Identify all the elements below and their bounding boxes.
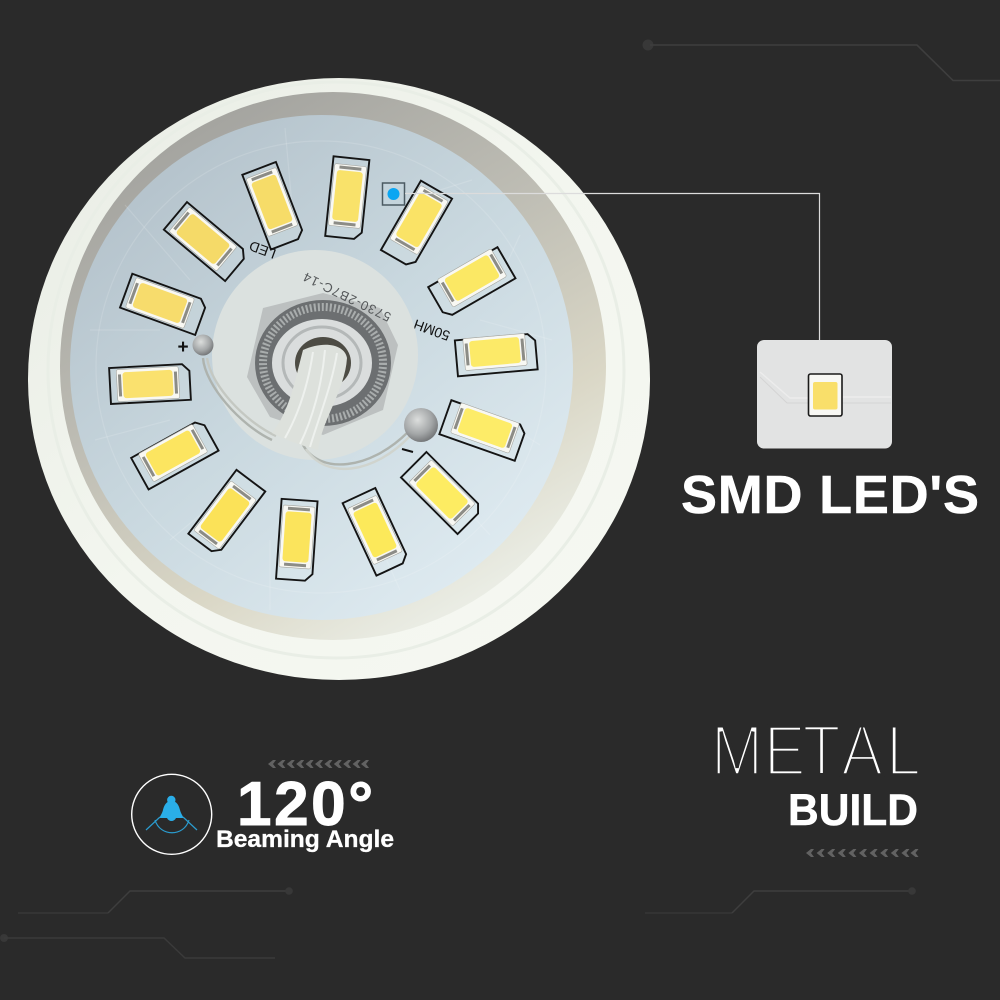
heading: METAL: METAL bbox=[711, 711, 921, 791]
circuit board disc bbox=[70, 115, 573, 620]
SMD LED thumbnail card bbox=[757, 340, 892, 448]
translucent cable bbox=[272, 345, 347, 450]
nut inner collar bbox=[272, 319, 372, 407]
heading: BUILD: BUILD bbox=[788, 786, 918, 835]
decorative circuit line: top right bbox=[642, 40, 1000, 80]
LED 6 bbox=[401, 452, 483, 534]
LED 9 bbox=[188, 470, 265, 555]
centre hole bbox=[295, 337, 351, 389]
solder ball right bbox=[404, 408, 438, 442]
board print: LED: LED bbox=[247, 238, 278, 262]
decorative circuit line: bottom right bbox=[645, 887, 916, 913]
label: Beaming Angle: Beaming Angle bbox=[216, 826, 394, 853]
LED 1 bbox=[325, 156, 369, 240]
LED 7 bbox=[343, 488, 409, 576]
board trace lines bbox=[90, 128, 552, 610]
silver lead wires bbox=[203, 358, 410, 469]
product photo: LED bulb top view bbox=[28, 78, 650, 680]
stat: 120 degrees: 120° bbox=[237, 770, 373, 839]
nut dark ring bbox=[255, 300, 391, 426]
inner rim step bbox=[48, 82, 624, 658]
translucent glue hub bbox=[212, 250, 418, 460]
LED 14 bbox=[242, 162, 305, 250]
callout marker on board bbox=[382, 183, 404, 205]
LED 5 bbox=[439, 399, 527, 461]
solder ball left bbox=[192, 334, 214, 356]
LED 3 bbox=[427, 245, 515, 318]
LED 13 bbox=[164, 202, 248, 281]
LED 12 bbox=[120, 274, 208, 335]
icon: beam angle bbox=[132, 774, 212, 854]
hex nut bbox=[247, 293, 398, 435]
board print: 50MH: 50MH bbox=[411, 316, 452, 344]
outer white rim bbox=[28, 78, 650, 680]
LED 11 bbox=[109, 364, 191, 404]
board polarity plus: + bbox=[177, 337, 189, 358]
decorative circuit line: bottom left upper bbox=[18, 887, 293, 913]
board polarity minus bbox=[402, 449, 413, 452]
grey gasket band bbox=[60, 92, 606, 640]
heading: SMD LED'S: SMD LED'S bbox=[681, 465, 979, 525]
chevron row: under BUILD bbox=[806, 849, 918, 857]
chevron row: above 120 degrees bbox=[268, 760, 369, 768]
LED 10 bbox=[131, 419, 219, 489]
decorative circuit line: bottom left lower bbox=[0, 934, 275, 958]
callout leader line bbox=[405, 194, 820, 340]
LED 4 bbox=[455, 332, 538, 376]
LED 8 bbox=[276, 499, 318, 581]
hub print: part number: 5730-2B7C-14 bbox=[300, 269, 393, 325]
LED 2 bbox=[381, 181, 452, 268]
